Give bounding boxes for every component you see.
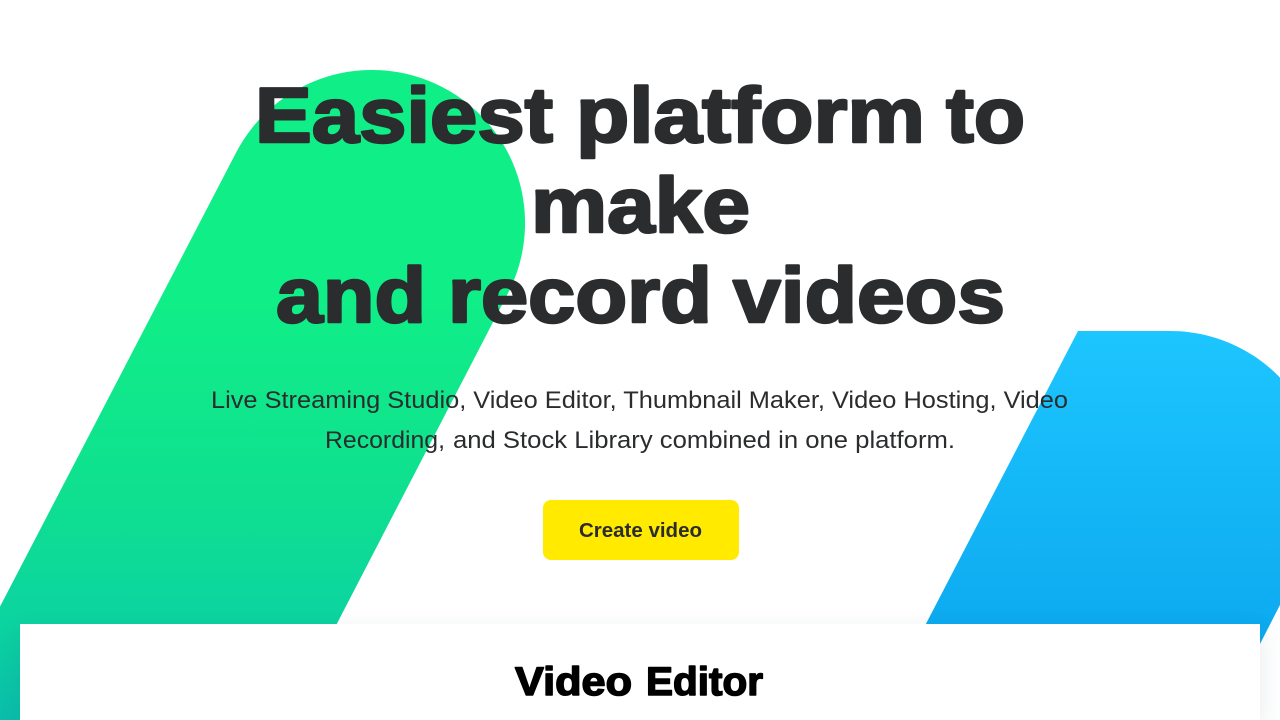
blue capsule [875, 331, 1280, 720]
subtitle: and Stock Library combined in one platform. [453, 427, 955, 454]
white card panel [20, 624, 1260, 720]
button: create video [543, 500, 739, 560]
headline: platform [576, 71, 925, 159]
headline [255, 71, 1025, 339]
headline: Easiest [255, 71, 553, 159]
card heading: video editor [515, 660, 763, 704]
card heading: video editor: Video [515, 660, 632, 704]
subtitle: Recording, [325, 427, 445, 454]
subtitle: Live Streaming Studio, Video Editor, Thumbnail Maker, Video Hosting, Video [211, 387, 1068, 414]
button: create video: Create video [579, 520, 702, 542]
subtitle [211, 387, 1068, 454]
headline: videos [733, 251, 1005, 339]
headline: and [276, 251, 426, 339]
green capsule [0, 70, 525, 720]
card heading: video editor: Editor [646, 660, 763, 704]
headline: record [448, 251, 712, 339]
headline: make [531, 161, 750, 249]
headline: to [946, 71, 1025, 159]
